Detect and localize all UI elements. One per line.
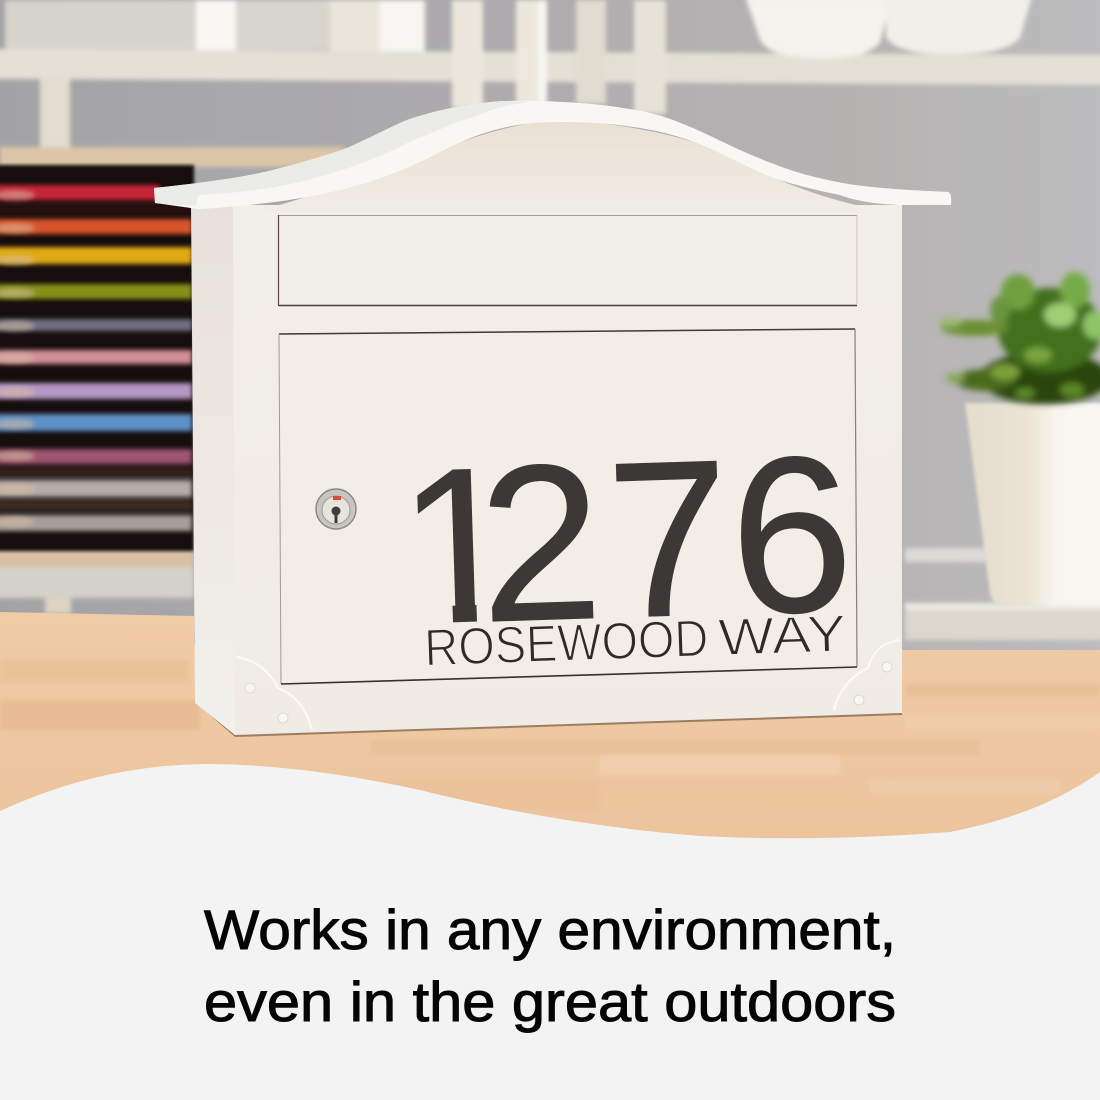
mailbox (154, 101, 951, 737)
corner bracket right (834, 640, 900, 710)
curved roof (154, 101, 951, 209)
caption heading (204, 898, 896, 1033)
mailbox side panel (191, 205, 235, 735)
house number: 7 (604, 414, 733, 665)
roof top surface (154, 101, 530, 206)
house number: 1 (394, 420, 525, 672)
rivets (245, 662, 892, 723)
wooden table top (0, 612, 1100, 860)
caption heading: even in the great outdoors (204, 970, 896, 1033)
street name: ROSEWOOD (423, 610, 709, 678)
corner bracket left (237, 657, 312, 730)
gable panel (262, 120, 860, 214)
mailbox contact shadow (196, 703, 902, 737)
paper stack (0, 165, 194, 551)
lower door (279, 329, 857, 684)
mailbox front (232, 205, 902, 735)
house number: 2 (476, 418, 605, 669)
background: studio wall (0, 0, 1100, 700)
shelving unit (0, 0, 1100, 640)
upper flap (278, 215, 857, 306)
wave caption panel (0, 764, 1100, 1100)
plant in white pot (939, 272, 1100, 606)
caption heading: Works in any environment, (204, 898, 896, 961)
street name: WAY (717, 605, 847, 667)
house number (384, 410, 856, 672)
house number: 6 (727, 410, 856, 661)
icon: key lock (316, 489, 356, 529)
